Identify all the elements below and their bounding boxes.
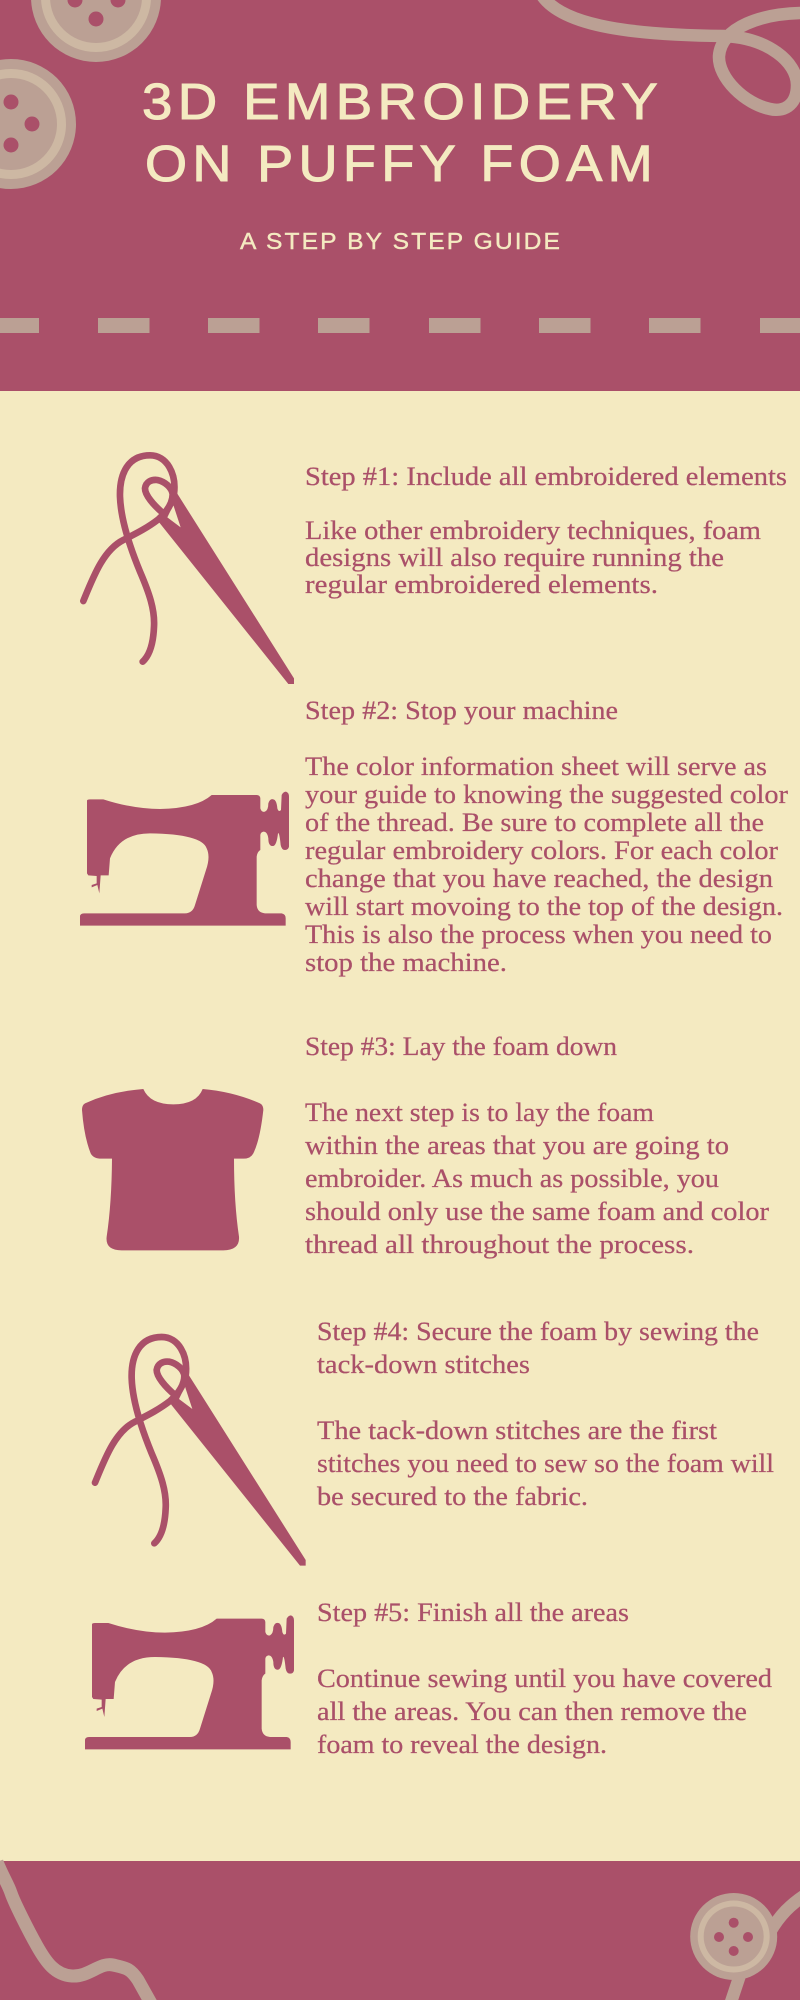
icon: needle and thread step 4 <box>95 1337 306 1566</box>
step 1 text <box>305 461 787 599</box>
step 5 text: Continue sewing until you have covered <box>317 1663 772 1693</box>
step 1 text: designs will also require running the <box>305 542 724 572</box>
step 3 text: should only use the same foam and color <box>305 1196 769 1226</box>
panel: footer band <box>0 1861 800 2000</box>
subtitle: A STEP BY STEP GUIDE <box>240 228 562 254</box>
step 5 text: Step #5: Finish all the areas <box>317 1597 629 1627</box>
step 4 text: be secured to the fabric. <box>317 1481 588 1511</box>
step 5 text: foam to reveal the design. <box>317 1729 607 1759</box>
step 4 text <box>317 1316 774 1511</box>
step 2 text: regular embroidery colors. For each color <box>305 835 778 865</box>
icon: button bottom right <box>690 1893 777 1980</box>
title: 3D EMBROIDERY <box>142 73 663 130</box>
step 2 text: your guide to knowing the suggested color <box>305 779 788 809</box>
panel: header band <box>0 0 800 391</box>
step 2 text <box>305 695 788 977</box>
icon: button left <box>0 59 76 189</box>
title: ON PUFFY FOAM <box>145 135 658 192</box>
step 1 text: Like other embroidery techniques, foam <box>305 515 761 545</box>
step 3 text: Step #3: Lay the foam down <box>305 1031 617 1061</box>
step 3 text: The next step is to lay the foam <box>305 1097 654 1127</box>
icon: button top left <box>31 0 161 62</box>
step 1 text: Step #1: Include all embroidered elements <box>305 461 787 491</box>
step 2 text: will start movoing to the top of the design. <box>305 891 783 921</box>
step 2 text: change that you have reached, the design <box>305 863 773 893</box>
step 3 text: within the areas that you are going to <box>305 1130 729 1160</box>
step 3 text: thread all throughout the process. <box>305 1229 694 1259</box>
step 2 text: Step #2: Stop your machine <box>305 695 618 725</box>
icon: thread behind bottom right button <box>730 1895 800 2000</box>
step 3 text <box>305 1031 769 1259</box>
icon: thread top right <box>541 0 800 110</box>
icon: needle and thread step 1 <box>83 455 294 684</box>
step 2 text: The color information sheet will serve as <box>305 751 767 781</box>
icon: sewing machine step 5 <box>85 1615 294 1749</box>
step 2 text: This is also the process when you need to <box>305 919 772 949</box>
icon: t-shirt step 3 <box>82 1089 263 1250</box>
step 4 text: Step #4: Secure the foam by sewing the <box>317 1316 759 1346</box>
step 1 text: regular embroidered elements. <box>305 569 658 599</box>
step 2 text: stop the machine. <box>305 947 507 977</box>
step 3 text: embroider. As much as possible, you <box>305 1163 719 1193</box>
step 5 text: all the areas. You can then remove the <box>317 1696 747 1726</box>
title <box>142 73 663 192</box>
step 4 text: stitches you need to sew so the foam will <box>317 1448 774 1478</box>
icon: sewing machine step 2 <box>80 792 289 926</box>
icon: thread bottom left <box>0 1862 152 2000</box>
step 5 text <box>317 1597 772 1759</box>
dashed stitch line <box>0 318 800 333</box>
step 2 text: of the thread. Be sure to complete all the <box>305 807 764 837</box>
step 4 text: tack-down stitches <box>317 1349 530 1379</box>
step 4 text: The tack-down stitches are the first <box>317 1415 718 1445</box>
